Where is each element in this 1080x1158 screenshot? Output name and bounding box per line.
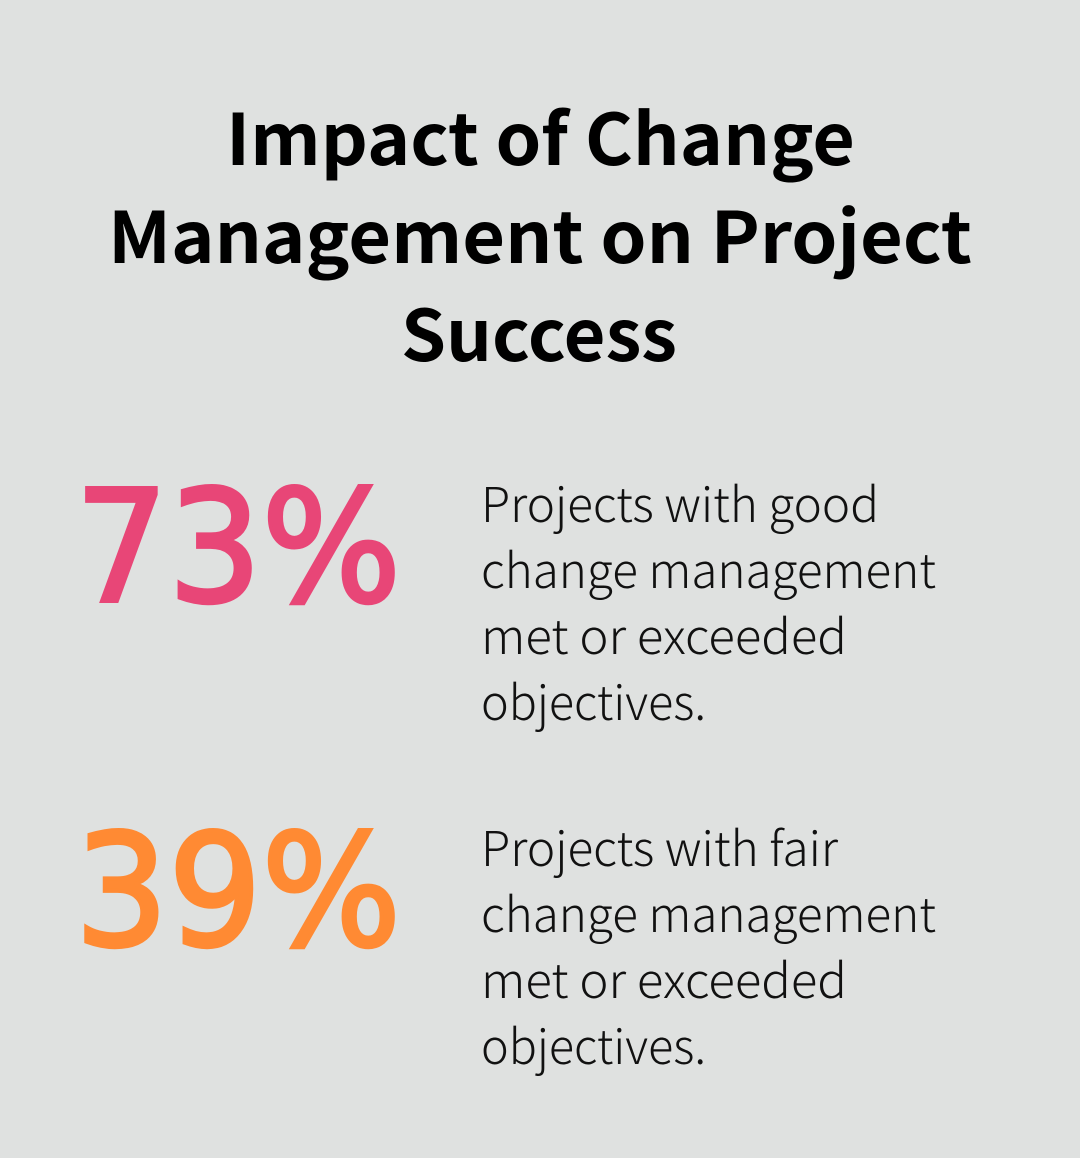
text: fair change management: objectives. [481,1008,706,1078]
stat: 39%: 39% [75,801,401,982]
text: good change management: change management [481,532,936,602]
title [108,84,972,382]
text: fair change management: met or exceeded [481,942,847,1012]
text: good change management: objectives. [481,664,706,734]
text: good change management: Projects with good [481,466,879,536]
text: fair change management [481,810,936,1078]
stat: 73%: 73% [75,457,401,638]
text: good change management: met or exceeded [481,598,847,668]
title: Management on Project [108,182,972,284]
text: fair change management: Projects with fair [481,810,839,880]
title: Success [401,280,677,382]
text: good change management [481,466,936,734]
text: fair change management: change management [481,876,936,946]
title: Impact of Change [226,84,855,186]
